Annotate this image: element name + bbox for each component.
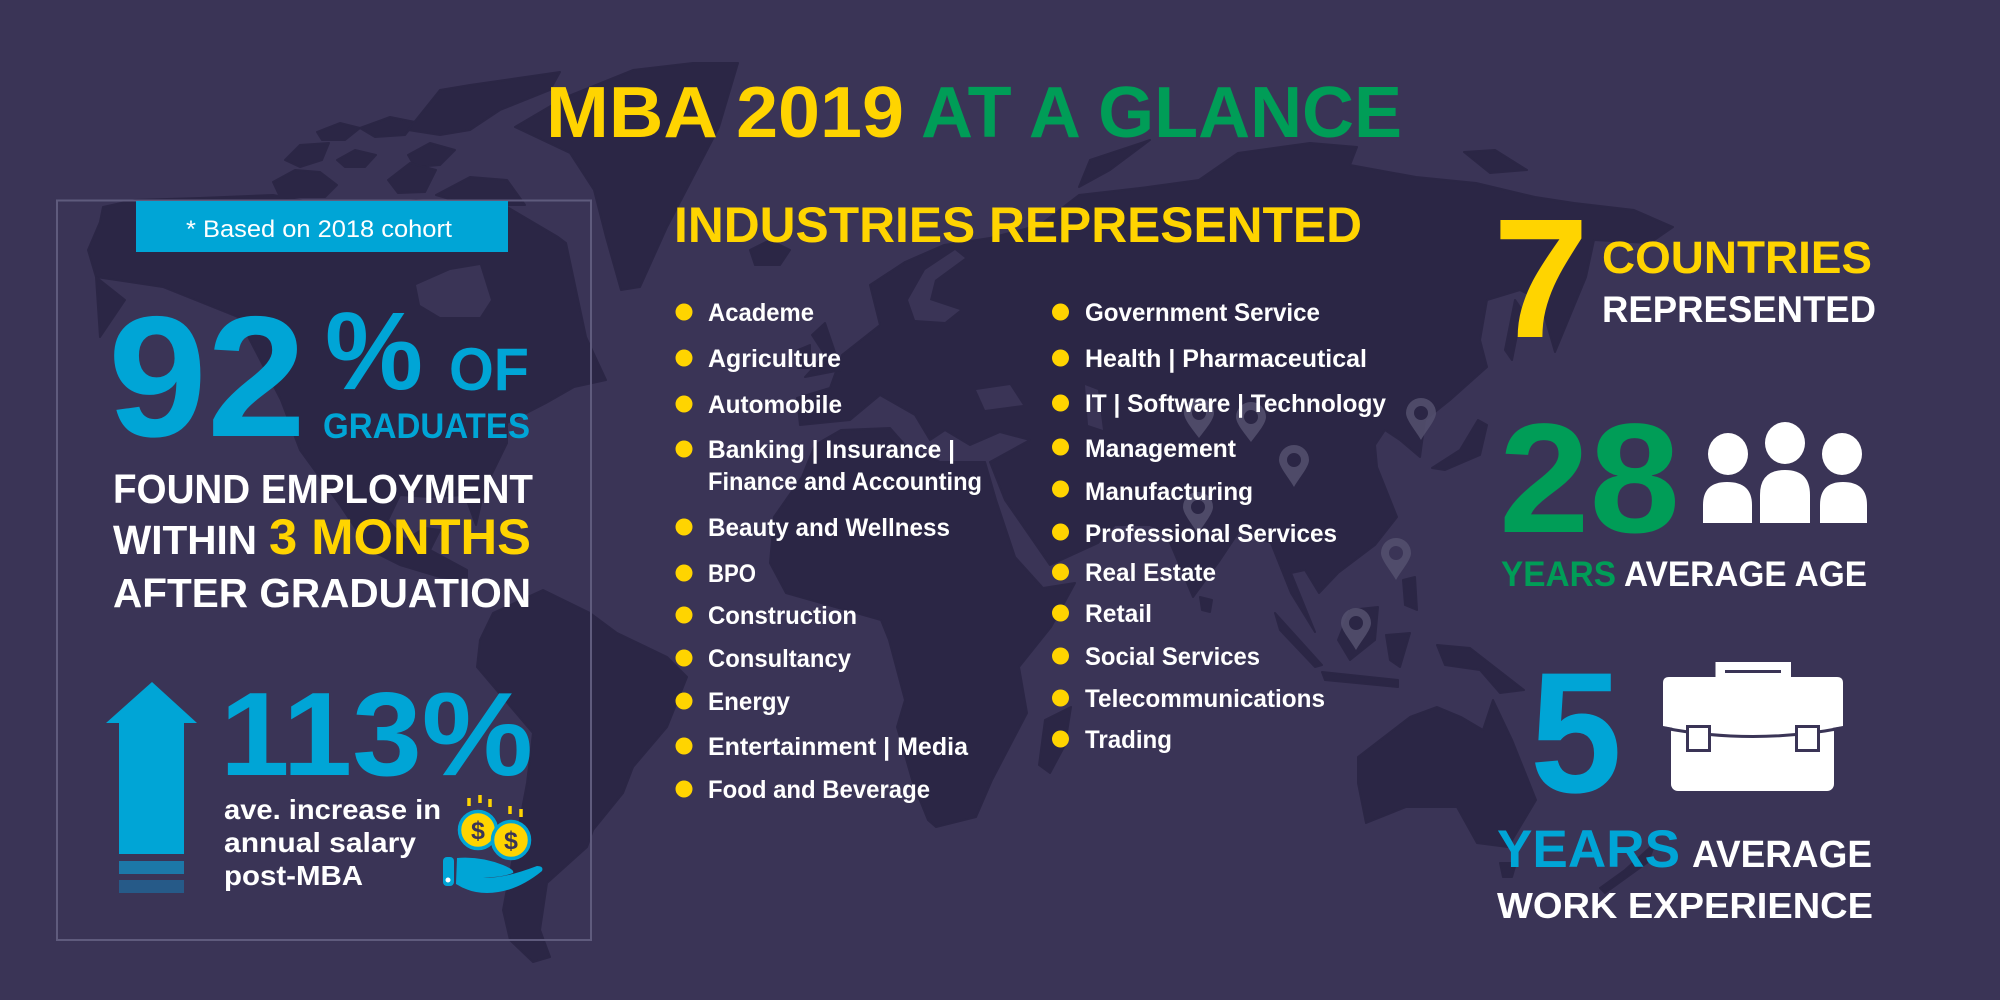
item: Finance and Accounting	[708, 468, 982, 496]
item	[676, 688, 790, 716]
item: Academe	[708, 299, 814, 327]
item: Telecommunications	[1085, 685, 1325, 713]
world map background	[88, 63, 1673, 962]
item: Management	[1085, 435, 1237, 463]
heading: industries represented: INDUSTRIES REPRESENTED	[674, 197, 1362, 253]
employment statement: FOUND EMPLOYMENT	[113, 466, 533, 512]
item: Retail	[1085, 600, 1152, 628]
list: industries column 2	[1052, 299, 1386, 754]
item: BPO	[708, 560, 756, 588]
stat: 92% of graduates: 92	[108, 281, 306, 473]
stat: 5 years average work experience: YEARS	[1497, 820, 1680, 879]
icon: coins over hand: $	[471, 817, 485, 845]
item: Banking | Insurance |	[708, 436, 955, 464]
item: Entertainment | Media	[708, 733, 969, 761]
stat: 28 years average age: 28	[1499, 392, 1680, 566]
stat: 5 years average work experience: 5	[1530, 637, 1622, 829]
icon: up arrow	[106, 682, 197, 893]
employment statement	[113, 466, 533, 616]
icon: three people	[1703, 422, 1867, 523]
icon: briefcase	[1663, 662, 1843, 791]
item: IT | Software | Technology	[1085, 390, 1386, 418]
title: MBA 2019	[546, 73, 904, 153]
note banner	[136, 201, 508, 252]
item: Government Service	[1085, 299, 1320, 327]
title	[546, 73, 1402, 153]
item	[1052, 600, 1152, 628]
stat: 7 countries represented: 7	[1493, 184, 1589, 374]
item: Manufacturing	[1085, 478, 1253, 506]
item: Trading	[1085, 726, 1172, 754]
inland seas	[416, 250, 1103, 430]
item: Professional Services	[1085, 520, 1337, 548]
item	[676, 436, 982, 496]
stat: 7 countries represented: COUNTRIES	[1602, 232, 1872, 283]
item: Food and Beverage	[708, 776, 930, 804]
note banner: * Based on 2018 cohort	[186, 216, 452, 243]
stat: 113%: 113%	[220, 668, 533, 801]
salary caption: ave. increase in	[224, 794, 441, 825]
item: Consultancy	[708, 645, 851, 673]
stat: 92% of graduates: GRADUATES	[323, 407, 530, 446]
stat: 5 years average work experience	[1497, 637, 1873, 926]
item	[676, 560, 756, 588]
item: Real Estate	[1085, 559, 1216, 587]
icon: coins over hand	[443, 795, 542, 893]
stat: 28 years average age	[1499, 392, 1867, 594]
stat: 7 countries represented	[1493, 184, 1876, 374]
salary caption: post-MBA	[224, 860, 363, 891]
employment statement: WITHIN	[113, 517, 257, 563]
stat: 92% of graduates: OF	[449, 336, 529, 403]
item: Automobile	[708, 391, 842, 419]
map pins	[1183, 398, 1436, 650]
stat: 92% of graduates: %	[325, 290, 423, 413]
salary caption: annual salary	[224, 827, 416, 858]
stat: 28 years average age: AVERAGE AGE	[1624, 555, 1867, 594]
stat: 7 countries represented: REPRESENTED	[1602, 289, 1876, 330]
item: Beauty and Wellness	[708, 514, 950, 542]
item: Energy	[708, 688, 790, 716]
item: Health | Pharmaceutical	[1085, 345, 1367, 373]
stat: 5 years average work experience: WORK EXPERIENCE	[1497, 885, 1873, 926]
item: Social Services	[1085, 643, 1260, 671]
list: industries column 1	[676, 299, 982, 804]
title: AT A GLANCE	[921, 73, 1402, 153]
stat: 28 years average age: YEARS	[1501, 555, 1616, 594]
employment statement: AFTER GRADUATION	[113, 570, 531, 616]
panel: employment and salary outcomes	[57, 200, 591, 940]
stat: 5 years average work experience: AVERAGE	[1692, 834, 1872, 876]
icon: coins over hand: $	[504, 827, 518, 855]
item: Construction	[708, 602, 857, 630]
stat: 92% of graduates	[108, 281, 530, 473]
employment statement: 3 MONTHS	[269, 509, 531, 565]
salary caption	[224, 794, 441, 891]
item: Agriculture	[708, 345, 841, 373]
